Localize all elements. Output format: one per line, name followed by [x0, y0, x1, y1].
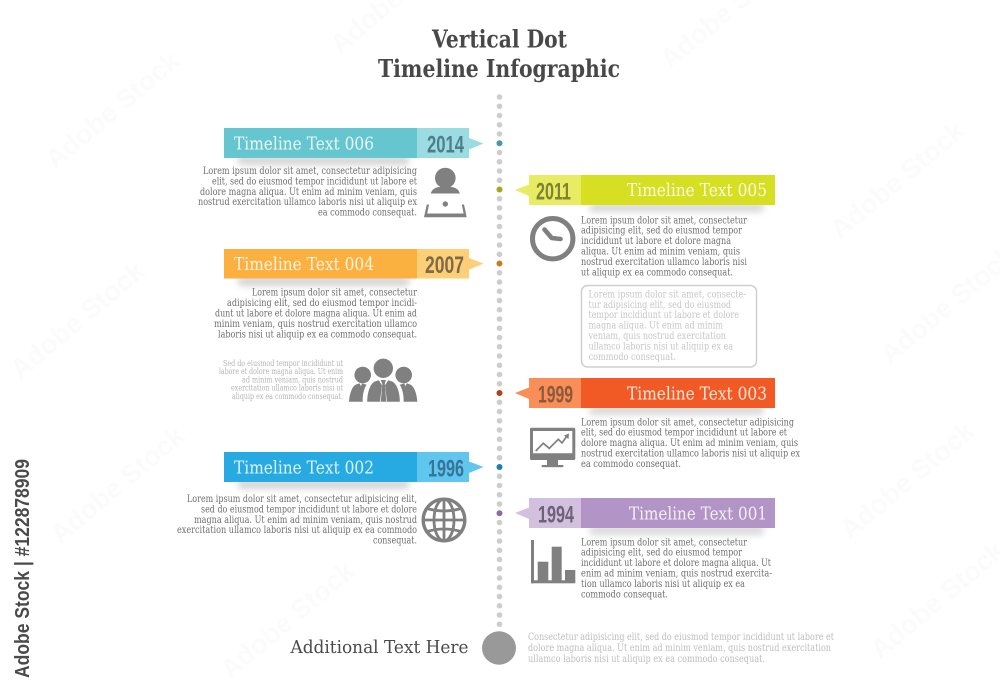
text block: 003 body: dolore magna aliqua. Ut enim ad minim veniam, quis: [581, 438, 798, 449]
callout: outlined note box: ullamco laboris nisi ut aliquip ex ea: [588, 342, 733, 352]
text block: 001 body: tion ullamco laboris nisi ut aliquip ex ea: [581, 579, 745, 590]
text block: 005 body: Lorem ipsum dolor sit amet, consectetur: [581, 215, 747, 226]
icon: clock: [532, 218, 573, 259]
panel: 2014 timeline text 006: [224, 128, 484, 165]
callout: outlined note box: veniam, quis nostrud exercitation: [588, 331, 726, 342]
title: Vertical Dot: [431, 24, 567, 54]
text block: team note: aliquip ex ea commodo consequat.: [232, 392, 343, 401]
text block: 004 body: laboris nisi ut aliquip ex ea commodo consequat.: [218, 329, 417, 340]
text block: 005 body: [581, 215, 747, 278]
panel: 1994 timeline text 001: 1994: [538, 502, 574, 529]
text block: 002 body: consequat.: [373, 536, 417, 547]
text block: 006 body: elit, sed do eiusmod tempor incididunt ut labore et: [212, 176, 417, 187]
panel: 2007 timeline text 004: 2007: [425, 252, 464, 279]
icon: globe: [423, 499, 465, 541]
icon: person at laptop: [424, 168, 467, 217]
panel: 1996 timeline text 002: [224, 452, 484, 489]
panel: 2014 timeline text 006: Timeline Text 006: [234, 134, 374, 155]
text block: team note: exercitation ullamco laboris nisi ut: [231, 384, 344, 393]
text block: 001 body: incididunt ut labore et dolore magna aliqua. Ut: [581, 558, 771, 569]
heading: additional text: Additional Text Here: [290, 637, 468, 658]
panel: 2014 timeline text 006: 2014: [427, 132, 464, 159]
text block: team note: labore et dolore magna aliqua. Ut enim: [219, 367, 343, 376]
text block: 006 body: dolore magna aliqua. Ut enim ad minim veniam, quis: [200, 187, 417, 198]
faint watermark: Adobe Stock: [835, 415, 981, 545]
text block: team note: Sed do eiusmod tempor incididunt ut: [223, 359, 344, 368]
faint watermark: Adobe Stock: [215, 555, 361, 685]
text block: 005 body: ut aliquip ex ea commodo consequat.: [581, 267, 733, 278]
callout: outlined note box: magna aliqua. Ut enim ad minim: [588, 321, 723, 332]
text block: footer note: dolore magna aliqua. Ut enim ad minim veniam, quis nostrud exercitation: [528, 643, 831, 654]
icon: end circle of timeline: [482, 631, 516, 665]
stock id label: Adobe Stock | #122878909: [12, 459, 34, 678]
panel: 1999 timeline text 003: [515, 378, 775, 415]
title: [378, 24, 620, 83]
text block: 003 body: ea commodo consequat.: [581, 459, 681, 470]
text block: team note: [219, 359, 344, 401]
text block: 002 body: sed do eiusmod tempor incididunt ut labore et dolore: [201, 504, 417, 515]
text block: 005 body: aliqua. Ut enim ad minim veniam, quis: [581, 246, 740, 258]
icon: team of people: [349, 359, 417, 402]
text block: 005 body: adipisicing elit, sed do eiusmod tempor: [581, 226, 742, 237]
panel: 1996 timeline text 002: Timeline Text 002: [234, 458, 374, 478]
text block: 006 body: Lorem ipsum dolor sit amet, consectetur adipisicing: [203, 166, 417, 177]
faint watermark: Adobe Stock: [45, 420, 191, 550]
panel: 1999 timeline text 003: Timeline Text 003: [627, 384, 767, 404]
panel: 1996 timeline text 002: 1996: [428, 456, 464, 482]
text block: 005 body: incididunt ut labore et dolore magna: [581, 236, 731, 247]
callout: outlined note box: tur adipisicing elit, sed do eiusmod: [588, 300, 731, 311]
text block: footer note: [528, 632, 834, 665]
text block: 001 body: Lorem ipsum dolor sit amet, consectetur: [581, 537, 747, 548]
panel: 2007 timeline text 004: Timeline Text 004: [234, 254, 374, 275]
faint watermark: Adobe Stock: [825, 115, 971, 245]
callout: outlined note box: commodo consequat.: [588, 352, 676, 363]
text block: 004 body: minim veniam, quis nostrud exercitation ullamco: [214, 319, 417, 330]
icon: monitor with rising chart: [530, 428, 575, 467]
panel: 2007 timeline text 004: [224, 249, 484, 286]
faint watermark: Adobe Stock: [40, 45, 186, 175]
text block: 004 body: dunt ut labore et dolore magna aliqua. Ut enim ad: [215, 308, 417, 320]
text block: 006 body: ea commodo consequat.: [318, 208, 417, 219]
text block: footer note: Consectetur adipisicing elit, sed do eiusmod tempor incididunt ut labore et: [528, 632, 834, 643]
text block: 001 body: commodo consequat.: [581, 589, 668, 600]
text block: team note: ad minim veniam, quis nostrud: [242, 375, 343, 384]
callout: outlined note box: [582, 286, 756, 367]
panel: 1994 timeline text 001: [515, 498, 775, 535]
text block: 002 body: Lorem ipsum dolor sit amet, consectetur adipisicing elit,: [187, 494, 417, 505]
text block: 006 body: [198, 166, 417, 219]
panel: 2011 timeline text 005: [515, 175, 775, 212]
text block: 001 body: adipisicing elit, sed do eiusmod tempor: [581, 548, 742, 559]
title: Timeline Infographic: [378, 54, 620, 83]
text block: 004 body: Lorem ipsum dolor sit amet, consectetur: [252, 288, 417, 299]
text block: 002 body: [177, 494, 417, 547]
panel: 2011 timeline text 005: Timeline Text 005: [627, 180, 767, 201]
text block: 006 body: nostrud exercitation ullamco laboris nisi ut aliquip ex: [198, 197, 417, 208]
panel: 1999 timeline text 003: 1999: [538, 382, 573, 409]
text block: 005 body: nostrud exercitation ullamco laboris nisi: [581, 257, 747, 268]
text block: 003 body: elit, sed do eiusmod tempor incididunt ut labore et: [581, 428, 787, 439]
text block: 001 body: enim ad minim veniam, quis nostrud exercita-: [581, 568, 772, 580]
faint watermark: Adobe Stock: [5, 255, 151, 385]
panel: 1994 timeline text 001: Timeline Text 001: [629, 504, 767, 524]
text block: 003 body: [581, 417, 800, 470]
text block: 004 body: [214, 288, 417, 340]
callout: outlined note box: Lorem ipsum dolor sit amet, consecte-: [588, 289, 746, 300]
text block: 002 body: magna aliqua. Ut enim ad minim veniam, quis nostrud: [194, 515, 417, 526]
dotted timeline spine: [496, 97, 502, 624]
panel: 2011 timeline text 005: 2011: [536, 178, 571, 205]
text block: footer note: ullamco laboris nisi ut aliquip ex ea commodo consequat.: [528, 654, 765, 665]
callout: outlined note box: tempor incididunt ut labore et dolore: [588, 310, 739, 321]
text block: 003 body: nostrud exercitation ullamco laboris nisi ut aliquip ex: [581, 448, 800, 460]
text block: 001 body: [581, 537, 772, 600]
icon: bar chart: [531, 540, 575, 583]
text block: 003 body: Lorem ipsum dolor sit amet, consectetur adipisicing: [581, 417, 794, 428]
text block: 002 body: exercitation ullamco laboris nisi ut aliquip ex ea commodo: [177, 525, 417, 536]
text block: 004 body: adipisicing elit, sed do eiusmod tempor incidi-: [227, 298, 417, 309]
